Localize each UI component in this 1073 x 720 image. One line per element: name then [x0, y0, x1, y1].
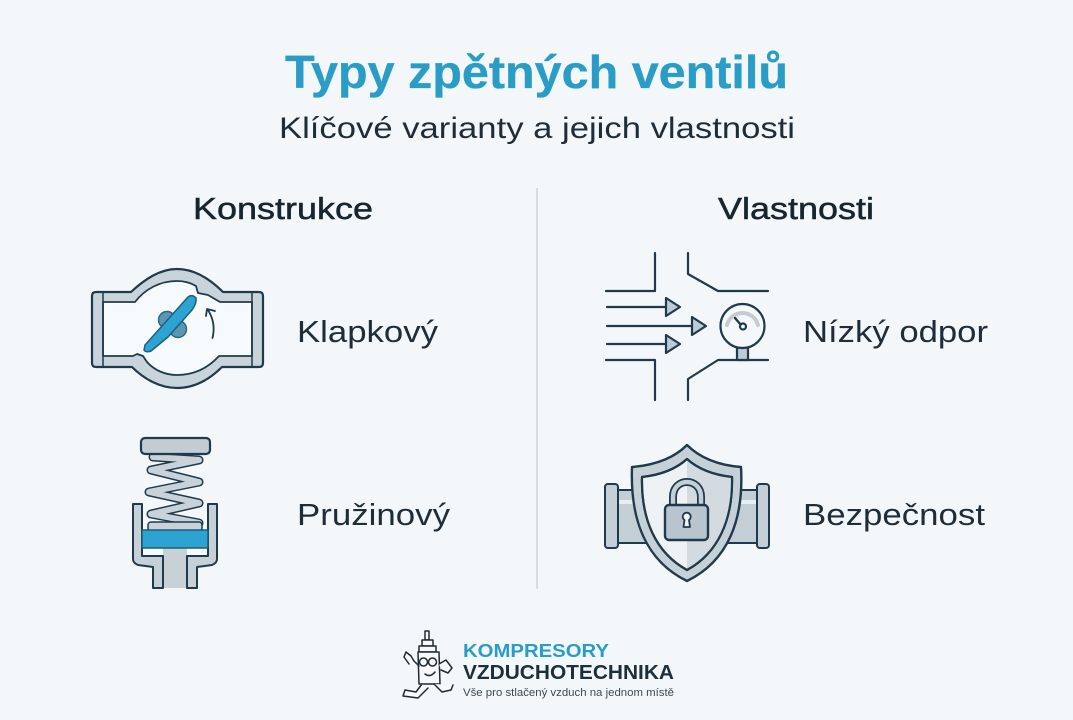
heading: Vlastnosti: Vlastnosti — [718, 191, 874, 226]
label: Nízký odpor: Nízký odpor — [803, 314, 988, 349]
heading: Konstrukce: Konstrukce — [193, 191, 373, 226]
icon: safety shield — [605, 445, 769, 581]
logo — [403, 631, 674, 699]
logo tagline: Vše pro stlačený vzduch na jednom místě — [463, 687, 674, 699]
icon: low resistance flow — [606, 253, 768, 400]
logo mascot — [403, 631, 453, 698]
logo: VZDUCHOTECHNIKA: VZDUCHOTECHNIKA — [463, 662, 674, 684]
icon: flap valve — [92, 269, 263, 388]
icon: spring valve — [133, 438, 217, 588]
title: Typy zpětných ventilů — [285, 46, 788, 98]
label: Bezpečnost: Bezpečnost — [803, 497, 985, 532]
subtitle: Klíčové varianty a jejich vlastnosti — [279, 112, 795, 145]
label: Pružinový: Pružinový — [297, 497, 451, 532]
label: Klapkový: Klapkový — [297, 314, 439, 349]
logo: KOMPRESORY: KOMPRESORY — [463, 640, 610, 661]
